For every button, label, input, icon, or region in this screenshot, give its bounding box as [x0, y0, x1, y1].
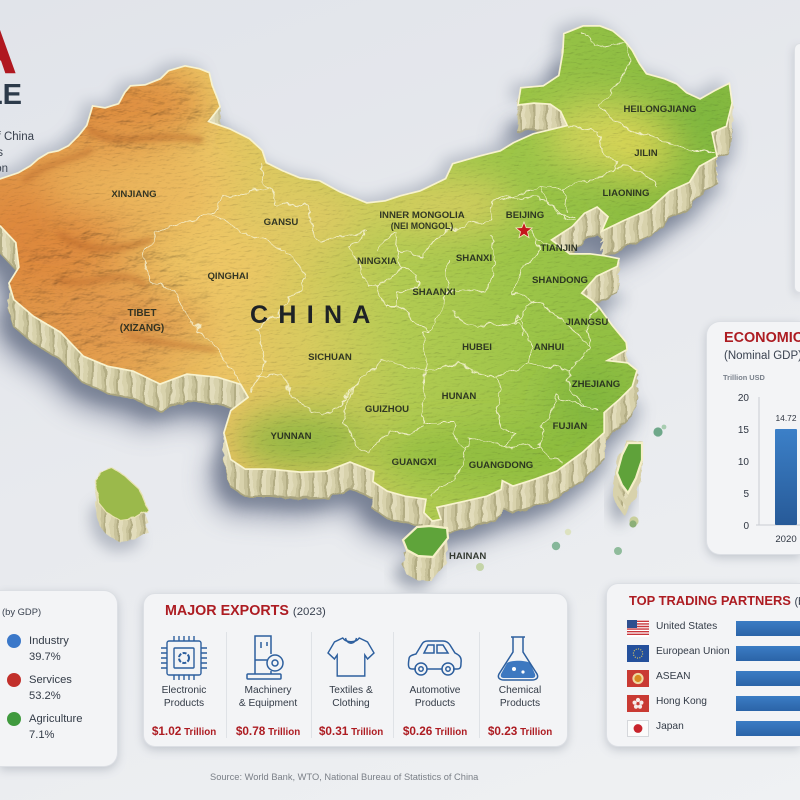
- map extruded side walls: [0, 29, 733, 549]
- icon: machine: [246, 635, 284, 680]
- bar: [736, 696, 800, 711]
- fine terrain texture: [0, 28, 730, 518]
- value: $1.02 Trillion: [152, 724, 216, 738]
- legend: industry: Industry: [29, 635, 69, 647]
- icon: flask: [498, 636, 538, 681]
- province labels: (NEI MONGOL): [391, 221, 453, 231]
- bar chart: GDP: 2020: [775, 534, 797, 545]
- province labels: GANSU: [264, 217, 298, 228]
- legend: services: [7, 673, 72, 702]
- province labels: JILIN: [634, 148, 658, 159]
- panel: top trading partners: [606, 583, 800, 747]
- title block: [0, 9, 34, 175]
- export: machinery: [236, 635, 300, 738]
- unit label: Trillion USD: [723, 373, 765, 382]
- value: $0.23 Trillion: [488, 724, 552, 738]
- icon: t-shirt: [327, 637, 375, 677]
- island: Taiwan: [614, 443, 642, 513]
- Himalaya and Tianshan ridges: [25, 130, 215, 350]
- province labels: YUNNAN: [270, 431, 312, 442]
- partner: European Union: [627, 645, 800, 662]
- flag: US: [627, 620, 649, 637]
- legend: agriculture: 7.1%: [29, 729, 54, 741]
- province labels: SICHUAN: [308, 352, 352, 363]
- label: Products: [500, 698, 540, 709]
- icon: car: [408, 640, 462, 676]
- relief map of China: [0, 16, 744, 593]
- panel: top right (cropped): [794, 43, 800, 293]
- name: Japan: [656, 721, 684, 732]
- label: Products: [164, 698, 204, 709]
- province labels: SHAANXI: [412, 287, 456, 298]
- flag: Japan: [627, 720, 649, 737]
- label: Clothing: [332, 698, 370, 709]
- province labels: GUANGXI: [392, 457, 437, 468]
- province labels: ANHUI: [534, 342, 565, 353]
- name: ASEAN: [656, 671, 691, 682]
- colour zones: [0, 70, 727, 480]
- province labels: [111, 104, 697, 562]
- heading: (by GDP): [2, 606, 41, 617]
- province labels: INNER MONGOLIA: [379, 210, 465, 221]
- flag: ASEAN: [627, 670, 649, 687]
- province labels: GUIZHOU: [365, 404, 409, 415]
- bar chart: GDP: 20: [738, 393, 749, 404]
- rugged mountain relief: [10, 77, 218, 378]
- label: Electronic: [162, 685, 206, 696]
- bar chart: GDP: 10: [738, 457, 749, 468]
- legend: agriculture: [7, 712, 82, 741]
- panel: major exports: [143, 593, 568, 747]
- label: [499, 685, 541, 709]
- partner: Hong Kong: [627, 695, 800, 712]
- label: & Equipment: [239, 698, 297, 709]
- bar chart: GDP: [738, 393, 800, 545]
- exports heading: MAJOR EXPORTS (2023): [165, 603, 326, 619]
- value: $0.31 Trillion: [319, 724, 383, 738]
- partner: Japan: [627, 720, 800, 737]
- value: $0.26 Trillion: [403, 724, 467, 738]
- province labels: QINGHAI: [207, 271, 249, 282]
- bar: [736, 721, 800, 736]
- province labels: JIANGSU: [566, 317, 608, 328]
- legend: services: 53.2%: [29, 690, 61, 702]
- icon: capital star: [516, 222, 532, 238]
- country label: CHINA: CHINA: [250, 301, 381, 329]
- export: chemical: [488, 636, 552, 738]
- label: Machinery: [244, 685, 292, 696]
- province labels: BEIJING: [506, 210, 544, 221]
- island: Hainan: [402, 526, 448, 581]
- label: [329, 685, 373, 709]
- province labels: HUBEI: [462, 342, 492, 353]
- label: [162, 685, 206, 709]
- name: United States: [656, 621, 717, 632]
- province labels: HEILONGJIANG: [623, 104, 697, 115]
- province labels: ZHEJIANG: [572, 379, 620, 390]
- coastline rim: [0, 25, 733, 522]
- label: [410, 685, 460, 709]
- province labels: TIANJIN: [540, 243, 578, 254]
- panel: economic growth: [706, 321, 800, 555]
- icon: microchip: [161, 636, 207, 680]
- label: [239, 685, 298, 709]
- partner: United States: [627, 620, 800, 637]
- legend: services: Services: [29, 674, 72, 686]
- province labels: FUJIAN: [553, 421, 587, 432]
- province labels: HAINAN: [449, 551, 486, 562]
- name: European Union: [656, 646, 730, 657]
- bar: [736, 646, 800, 661]
- province labels: NINGXIA: [357, 256, 397, 267]
- partner: ASEAN: [627, 670, 800, 687]
- export: textiles: [319, 637, 383, 738]
- name: Hong Kong: [656, 696, 707, 707]
- island: southwest islet: [95, 468, 148, 542]
- legend: industry: [7, 634, 69, 663]
- export: electronic products: [152, 636, 216, 738]
- legend: industry: 39.7%: [29, 651, 61, 663]
- export: automotive: [403, 640, 467, 738]
- intro text: [0, 131, 34, 175]
- province labels: (XIZANG): [120, 323, 164, 334]
- legend: agriculture: Agriculture: [29, 713, 82, 725]
- map cast shadow: [0, 21, 739, 589]
- label: Automotive: [410, 685, 460, 696]
- small offshore islands: [476, 425, 666, 571]
- label: Products: [415, 698, 455, 709]
- bar chart: GDP: 0: [743, 521, 749, 532]
- flag: Hong Kong: [627, 695, 649, 712]
- subheading: (Nominal GDP): [724, 350, 800, 362]
- map land surface with elevation colours: [0, 25, 733, 522]
- label: Chemical: [499, 685, 541, 696]
- value: $0.78 Trillion: [236, 724, 300, 738]
- province labels: SHANXI: [456, 253, 492, 264]
- source note: Source: World Bank, WTO, National Bureau of Statistics of China: [210, 772, 478, 782]
- province labels: HUNAN: [442, 391, 476, 402]
- bar chart: GDP: 5: [743, 489, 749, 500]
- flag: EU: [627, 645, 649, 662]
- label: Textiles &: [329, 685, 373, 696]
- province labels: TIBET: [128, 308, 156, 319]
- bar chart: GDP: 14.72: [776, 413, 797, 423]
- province labels: LIAONING: [603, 188, 649, 199]
- bar: [736, 621, 800, 636]
- province labels: GUANGDONG: [469, 460, 533, 471]
- province labels: SHANDONG: [532, 275, 588, 286]
- bar chart: GDP: 15: [738, 425, 749, 436]
- panel: GDP composition: [0, 590, 118, 767]
- province labels: XINJIANG: [111, 189, 157, 200]
- province borders: [143, 30, 717, 497]
- bar: [736, 671, 800, 686]
